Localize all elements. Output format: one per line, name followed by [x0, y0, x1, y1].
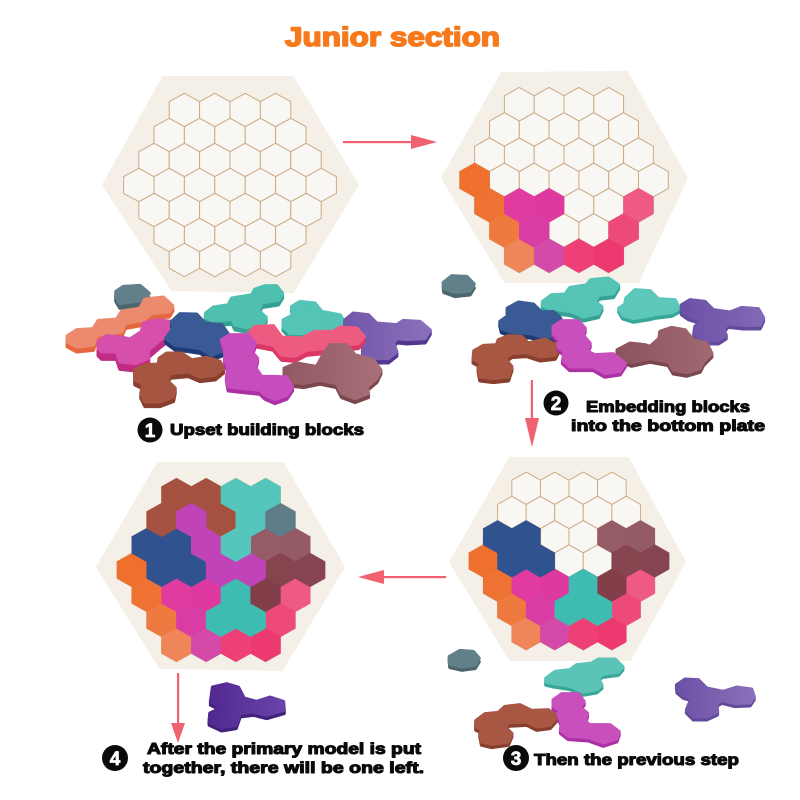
- caption 2: into the bottom plate: [571, 418, 765, 435]
- block: teal small: [283, 302, 345, 337]
- caption 4: [102, 741, 424, 777]
- caption 1: Upset building blocks: [170, 422, 364, 439]
- piece: teal: [221, 478, 280, 562]
- caption 2: [544, 390, 765, 435]
- partly filled board: [442, 72, 687, 282]
- leftover purple block: [209, 684, 284, 731]
- arrow: step 2 to 3: [525, 380, 539, 447]
- block: teal small: [619, 290, 679, 322]
- block: navy blue: [166, 314, 228, 360]
- block: salmon: [67, 297, 173, 352]
- caption 3: [503, 745, 739, 771]
- block: teal large: [543, 278, 618, 321]
- block: brown: [476, 705, 557, 747]
- block: purple: [345, 313, 430, 363]
- scattered blocks: [443, 276, 763, 382]
- caption 4: After the primary model is put: [147, 741, 422, 758]
- block: brown: [135, 353, 223, 406]
- piece: violet: [176, 503, 266, 587]
- caption 3: 3: [511, 749, 521, 770]
- panel: step 3: [449, 458, 754, 771]
- empty hexagon board: [103, 77, 358, 292]
- mostly filled board: [450, 458, 685, 660]
- block: violet: [222, 335, 292, 403]
- caption 1: 1: [145, 421, 156, 442]
- caption 3: Then the previous step: [534, 752, 739, 769]
- arrow: step 3 to 4: [358, 570, 446, 584]
- arrow: step 4 down: [171, 673, 185, 743]
- block: teal: [546, 659, 623, 695]
- block: mauve: [617, 328, 712, 376]
- block: mauve: [284, 345, 381, 402]
- caption 4: 4: [110, 749, 121, 770]
- caption 1: [138, 418, 364, 442]
- block: violet: [553, 321, 625, 377]
- block: brown: [473, 336, 559, 382]
- panel: step 1: [67, 77, 430, 442]
- piece: brown: [147, 478, 236, 537]
- panel: step 4: [97, 463, 424, 777]
- scattered blocks: [449, 651, 754, 747]
- block: purple: [682, 300, 763, 344]
- block: pink: [248, 326, 364, 361]
- scattered blocks: [67, 286, 430, 406]
- block: navy blue: [500, 302, 561, 341]
- block: grey: [443, 276, 474, 296]
- block: violet: [553, 694, 619, 746]
- completed board: [97, 463, 344, 670]
- block: purple: [677, 679, 754, 720]
- arrow: step 1 to 2: [343, 135, 437, 149]
- block: grey: [116, 286, 149, 308]
- block: teal large: [206, 286, 282, 332]
- block: magenta: [98, 320, 173, 371]
- piece: grey: [266, 503, 295, 537]
- title: Junior section: [285, 22, 500, 52]
- panel: step 2: [442, 72, 765, 435]
- caption 2: Embedding blocks: [586, 399, 750, 416]
- caption 4: together, there will be one left.: [143, 760, 424, 777]
- block: grey: [449, 651, 479, 670]
- caption 2: 2: [551, 394, 561, 415]
